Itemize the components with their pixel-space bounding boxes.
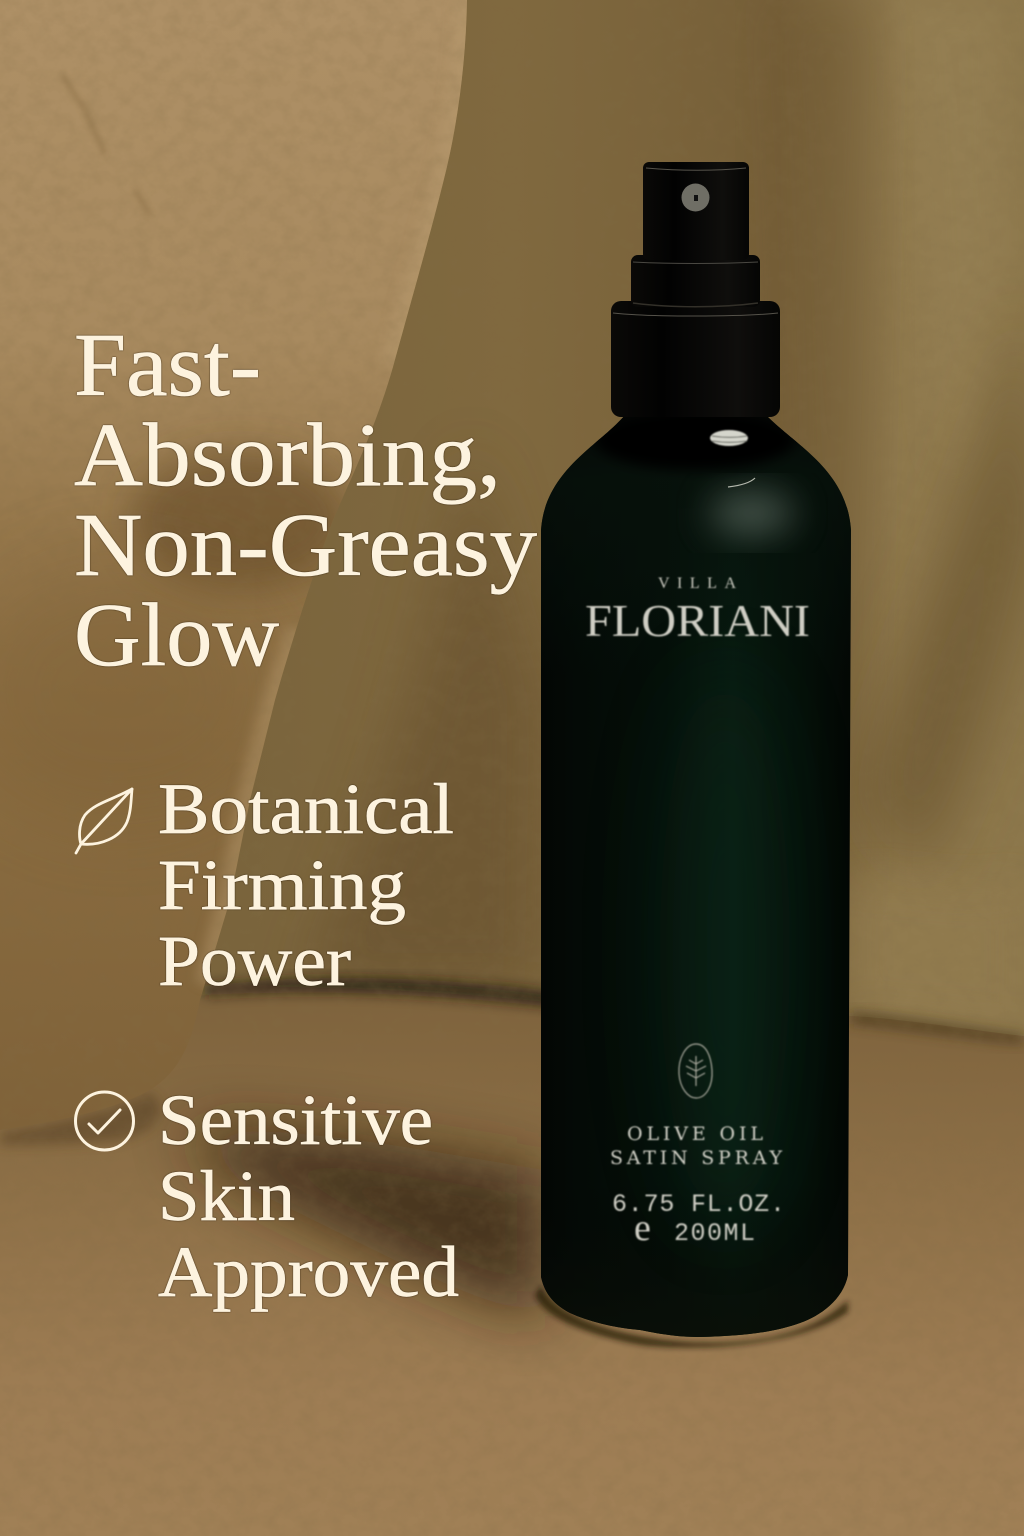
headline: Non-Greasy [74,496,537,595]
bottle label: product name [610,1123,782,1169]
highlight on shoulder [710,430,748,446]
bottle label: brand [585,575,810,646]
background: tan floor [0,978,1024,1536]
benefit: botanical firming power: Botanical [158,769,454,849]
bottle label: product name: OLIVE OIL [627,1123,763,1145]
benefit: sensitive skin approved: Approved [158,1232,459,1312]
icon: leaf [76,789,132,853]
spray nozzle [682,184,710,212]
spray collar [611,301,780,417]
bottle label: olive emblem [679,1044,712,1098]
benefit: sensitive skin approved: Skin [158,1156,295,1236]
headline: Absorbing, [74,406,501,505]
bottle label: product name: SATIN SPRAY [610,1147,782,1169]
headline: Fast- [74,316,261,415]
benefit: sensitive skin approved [158,1080,459,1312]
bottle label: volume: 200ML [674,1219,755,1248]
benefit: botanical firming power: Power [158,921,351,1001]
bottle label: volume: 6.75 FL.OZ. [612,1190,785,1219]
benefit: botanical firming power: Firming [158,845,406,925]
bottle label: brand: FLORIANI [585,595,810,646]
bottle label: volume [612,1190,785,1249]
bottle body [541,410,851,1340]
bottle label: volume: e [634,1207,651,1249]
bottle label: brand: VILLA [658,575,736,592]
headline [74,316,537,685]
background: olive drape [0,0,1024,1060]
bottle [541,162,851,1340]
spray actuator [643,162,749,260]
icon: check circle [76,1092,134,1150]
spray mid ring [631,255,760,307]
headline: Glow [74,586,279,685]
benefit: sensitive skin approved: Sensitive [158,1080,433,1160]
bottle contact shadow [535,1285,848,1348]
benefit: botanical firming power [158,769,454,1001]
background: sand pedestal form [0,0,467,1130]
